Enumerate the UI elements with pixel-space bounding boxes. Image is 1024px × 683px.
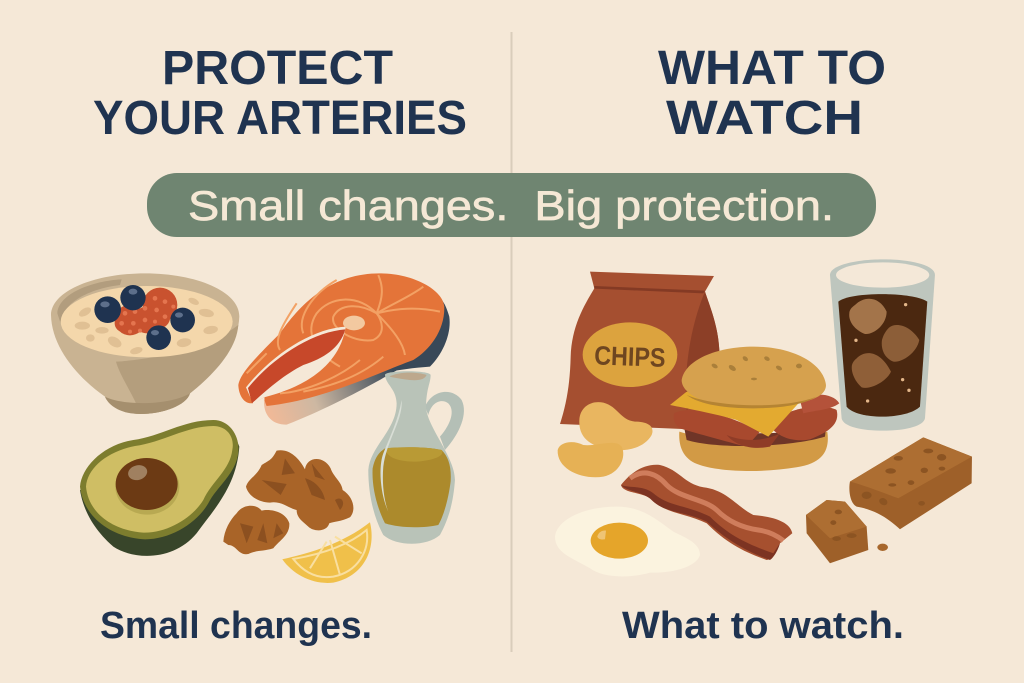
caption: small changes: Small changes.	[100, 605, 372, 647]
icon: walnuts	[223, 450, 353, 554]
illustration: healthy foods	[51, 273, 464, 583]
icon: potato chips	[558, 402, 653, 477]
heading: protect your arteries: YOUR ARTERIES	[93, 92, 467, 145]
icon: oatmeal bowl	[51, 273, 239, 414]
icon: brownie bar	[849, 437, 972, 529]
heading: what to watch	[658, 42, 886, 145]
banner: small changes, big protection	[147, 173, 876, 237]
icon: avocado half	[80, 420, 239, 556]
heading: what to watch: WATCH	[666, 92, 863, 145]
icon: salmon steak	[238, 273, 450, 425]
caption: what to watch: What to watch.	[622, 605, 904, 647]
heading: what to watch: WHAT TO	[658, 42, 886, 95]
icon: fried egg	[555, 507, 700, 576]
icon: bacon strip	[621, 465, 792, 560]
icon: soda glass	[830, 259, 935, 431]
heading: protect your arteries: PROTECT	[162, 42, 393, 95]
banner: small changes, big protection: Small changes. Big protection.	[188, 182, 834, 229]
icon: chips bag	[560, 272, 719, 430]
icon: olive oil jug	[368, 371, 464, 544]
icon: lemon wedge	[282, 522, 372, 583]
heading: protect your arteries	[93, 42, 467, 145]
icon: burger	[670, 347, 839, 471]
icon: brownie crumb	[806, 500, 888, 563]
icon: chips bag: CHIPS	[594, 340, 666, 373]
illustration: foods to watch	[555, 259, 972, 576]
